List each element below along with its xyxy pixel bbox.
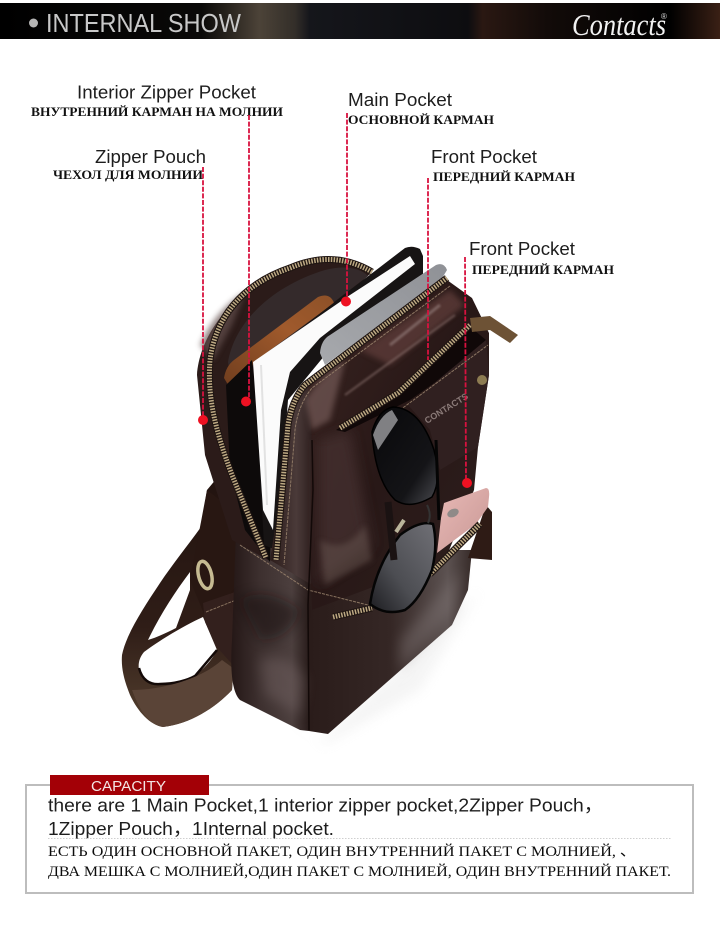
zipper: front pocket <box>340 325 488 428</box>
callout line: front pocket lower <box>465 257 466 482</box>
label: main pocket <box>348 90 494 127</box>
label: front pocket lower: ПЕРЕДНИЙ КАРМАН <box>472 262 614 277</box>
label: zipper pouch <box>53 147 206 182</box>
capacity heading <box>50 775 209 795</box>
zipper: phone pocket <box>430 524 480 574</box>
label: front pocket lower: Front Pocket <box>469 239 575 259</box>
label: front pocket lower <box>469 239 614 277</box>
label: front pocket upper <box>431 147 575 184</box>
strap leather tab <box>203 591 238 664</box>
label: interior zipper pocket <box>31 82 283 119</box>
interior lining <box>228 268 368 390</box>
capacity russian text: ЕСТЬ ОДИН ОСНОВНОЙ ПАКЕТ, ОДИН ВНУТРЕННИЙ ПАКЕТ С МОЛНИЕЙ, 、 <box>48 843 636 860</box>
brown wallet <box>224 295 334 388</box>
label: main pocket: Main Pocket <box>348 90 452 110</box>
header bullet <box>29 18 38 28</box>
panel: capacity <box>26 775 693 893</box>
lower front panel <box>309 550 472 734</box>
callout line: interior zipper pocket <box>248 115 250 398</box>
upper side panel <box>270 380 318 585</box>
shoulder strap <box>122 478 240 727</box>
upper front panel <box>308 280 489 610</box>
black interior <box>226 360 272 562</box>
capacity english text: 1Zipper Pouch，1Internal pocket. <box>48 818 334 839</box>
zipper: lower pocket <box>333 608 372 617</box>
label: zipper pouch: ЧЕХОЛ ДЛЯ МОЛНИИ <box>53 167 203 182</box>
strap hook ring <box>195 560 215 590</box>
capacity russian text <box>48 843 671 880</box>
bag photo illustration <box>122 247 518 745</box>
label: interior zipper pocket: ВНУТРЕННИЙ КАРМАН НА МОЛНИИ <box>31 104 283 119</box>
zipper pull <box>470 316 518 343</box>
label: front pocket upper: ПЕРЕДНИЙ КАРМАН <box>433 169 575 184</box>
brand logo: ® <box>661 12 667 21</box>
label: zipper pouch: Zipper Pouch <box>95 147 206 167</box>
header band <box>0 3 720 39</box>
front pocket opening <box>336 325 486 432</box>
header title: INTERNAL SHOW <box>46 10 241 38</box>
label: interior zipper pocket: Interior Zipper Pocket <box>77 82 256 102</box>
white book pages <box>253 256 415 530</box>
callout line: main pocket <box>346 113 348 300</box>
capacity english text: there are 1 Main Pocket,1 interior zipper pocket,2Zipper Pouch， <box>48 794 603 816</box>
pink phone <box>437 488 489 553</box>
brand logo: Contacts <box>572 7 666 42</box>
callout line: zipper pouch <box>202 167 204 420</box>
grey tablet <box>320 264 447 365</box>
marker dots <box>198 296 472 488</box>
capacity russian text: ДВА МЕШКА С МОЛНИЕЙ,ОДИН ПАКЕТ С МОЛНИЕЙ, ОДИН ВНУТРЕННИЙ ПАКЕТ. <box>48 863 671 880</box>
black notebook <box>254 247 423 550</box>
side rivet <box>477 375 487 385</box>
zipper: main outer <box>209 259 372 558</box>
glossy highlights <box>305 290 465 585</box>
brand emboss on bag: CONTACTS <box>423 391 470 426</box>
capacity heading: CAPACITY <box>91 779 166 795</box>
lower seam stitching <box>240 545 372 606</box>
zipper: main inner <box>276 278 450 565</box>
flap behind phone <box>468 505 492 560</box>
label: front pocket upper: Front Pocket <box>431 147 537 167</box>
callout line: front pocket upper <box>427 178 429 360</box>
sunglasses <box>370 407 439 612</box>
capacity english text <box>48 794 603 839</box>
back shell <box>197 259 372 560</box>
label: main pocket: ОСНОВНОЙ КАРМАН <box>348 112 494 127</box>
lower left side panel <box>231 530 312 731</box>
ground shadow <box>240 590 480 745</box>
